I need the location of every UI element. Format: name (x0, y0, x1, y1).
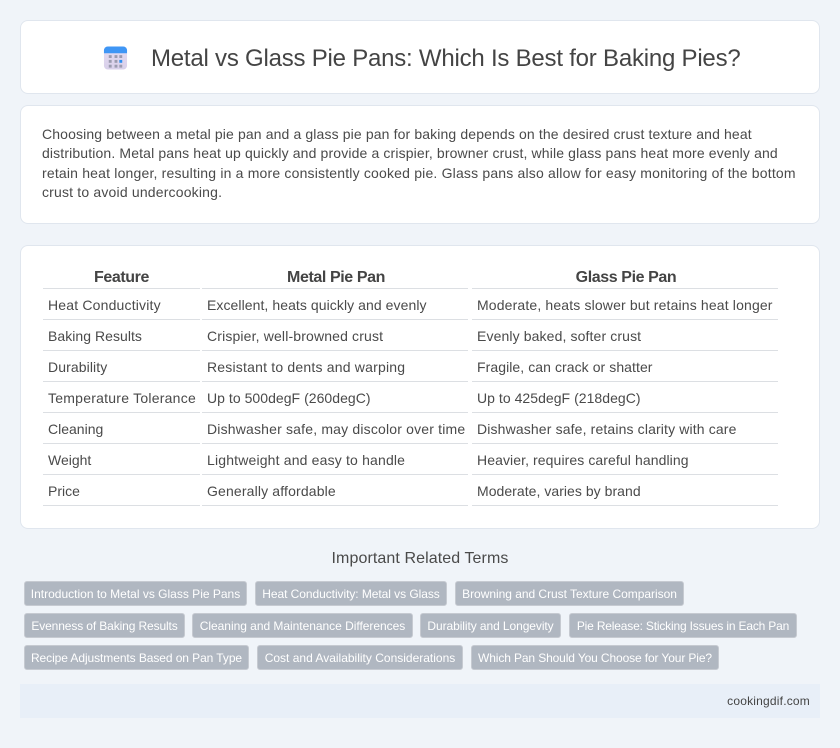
row: weight: Heavier, requires careful handling (477, 452, 689, 468)
tag (569, 613, 797, 638)
table header: Feature (94, 269, 149, 286)
intro text (42, 126, 796, 200)
row: baking results: Crispier, well-browned crust (207, 328, 383, 344)
tag: Heat Conductivity: Metal vs Glass (262, 587, 440, 601)
intro text: Choosing between a metal pie pan and a glass pie pan for baking depends on the desired crust texture and heat (42, 126, 752, 142)
tag (192, 613, 413, 638)
tag (24, 581, 247, 606)
row: temperature tolerance: Up to 425degF (218degC) (477, 390, 641, 406)
row: price (48, 483, 641, 499)
row: heat conductivity (48, 297, 773, 313)
intro text: distribution. Metal pans heat up quickly and provide a crispier, browner crust, while glass pans heat more evenly and (42, 145, 778, 161)
row: cleaning: Dishwasher safe, may discolor over time (207, 421, 465, 437)
tag (257, 645, 463, 670)
tag: Cleaning and Maintenance Differences (200, 619, 405, 633)
tag: Which Pan Should You Choose for Your Pie? (478, 651, 712, 665)
footer site name: cookingdif.com (727, 694, 810, 708)
related term tags (24, 581, 797, 670)
tag: Durability and Longevity (427, 619, 554, 633)
tag: Introduction to Metal vs Glass Pie Pans (31, 587, 240, 601)
table header: Metal Pie Pan (287, 269, 385, 286)
tag: Recipe Adjustments Based on Pan Type (31, 651, 242, 665)
row: baking results: Evenly baked, softer crust (477, 328, 641, 344)
comparison table panel (20, 245, 820, 529)
tag (455, 581, 684, 606)
tag: Evenness of Baking Results (31, 619, 178, 633)
row: price: Price (48, 483, 80, 499)
footer bar (20, 684, 820, 718)
row: durability: Fragile, can crack or shatter (477, 359, 653, 375)
intro text: crust to avoid undercooking. (42, 184, 222, 200)
intro text: retain heat longer, resulting in a more consistently cooked pie. Glass pans also allow for easy monitoring of the bottom (42, 164, 796, 180)
row: heat conductivity: Moderate, heats slower but retains heat longer (477, 297, 773, 313)
tag (24, 645, 249, 670)
table header: Glass Pie Pan (576, 269, 676, 286)
row: cleaning (48, 421, 737, 437)
row: temperature tolerance: Up to 500degF (260degC) (207, 390, 371, 406)
row: price: Moderate, varies by brand (477, 483, 641, 499)
tag: Cost and Availability Considerations (265, 651, 455, 665)
row: cleaning: Dishwasher safe, retains clarity with care (477, 421, 737, 437)
tag: Pie Release: Sticking Issues in Each Pan (577, 619, 789, 633)
row: temperature tolerance (48, 390, 641, 406)
tag (420, 613, 561, 638)
row: cleaning: Cleaning (48, 421, 103, 437)
row: price: Generally affordable (207, 483, 336, 499)
tag: Browning and Crust Texture Comparison (462, 587, 677, 601)
row: weight: Lightweight and easy to handle (207, 452, 405, 468)
tag (24, 613, 185, 638)
title: Metal vs Glass Pie Pans: Which Is Best for Baking Pies? (151, 45, 740, 72)
row: durability: Resistant to dents and warping (207, 359, 405, 375)
row: temperature tolerance: Temperature Tolerance (48, 390, 196, 406)
row: weight: Weight (48, 452, 91, 468)
comparison table (43, 269, 778, 506)
row: heat conductivity: Excellent, heats quickly and evenly (207, 297, 427, 313)
row: durability: Durability (48, 359, 107, 375)
icon: calendar (104, 46, 128, 70)
header panel (20, 20, 820, 94)
row: durability (48, 359, 653, 375)
table header (94, 269, 676, 286)
row: heat conductivity: Heat Conductivity (48, 297, 161, 313)
tag (471, 645, 719, 670)
tag (255, 581, 447, 606)
intro paragraph panel (20, 105, 820, 224)
row: weight (48, 452, 689, 468)
row: baking results: Baking Results (48, 328, 142, 344)
related terms heading: Important Related Terms (332, 550, 508, 567)
row: baking results (48, 328, 641, 344)
